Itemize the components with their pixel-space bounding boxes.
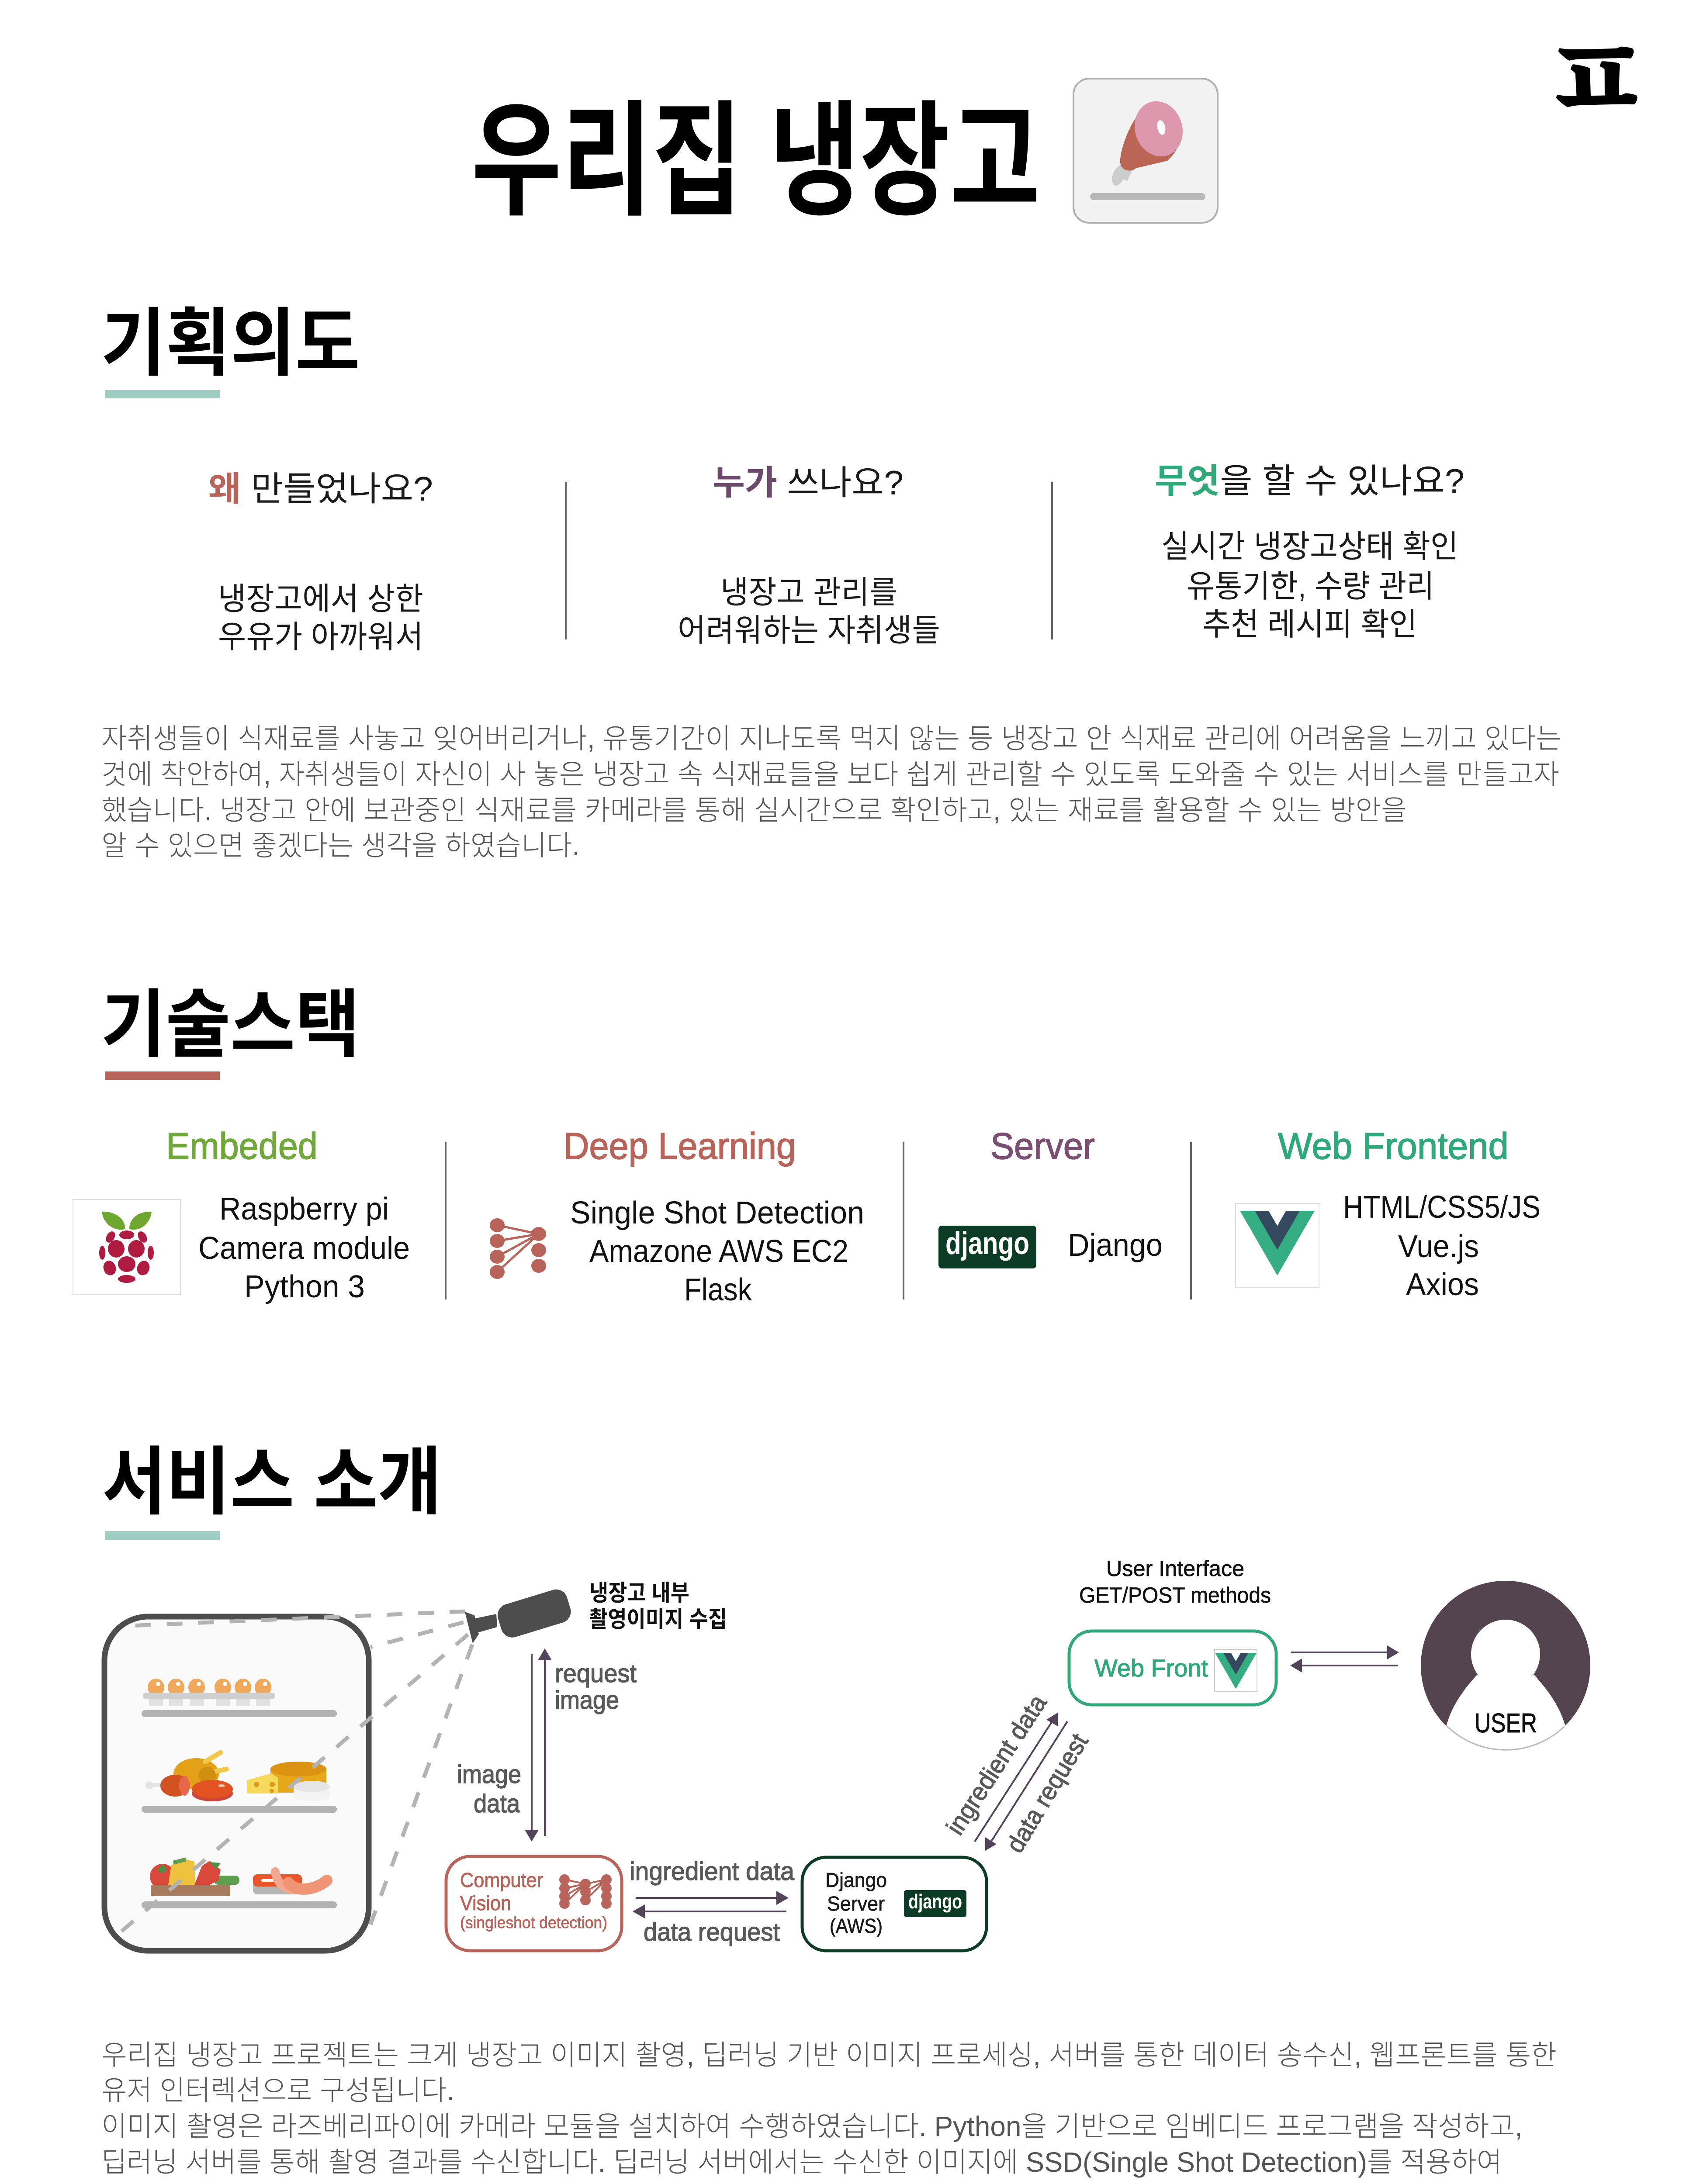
column heading: Deep Learning: [564, 1126, 796, 1167]
text block: service description: 이미지 촬영은 라즈베리파이에 카메라 모듈을 설치하여 수행하였습니다. Python을 기반으로 임베디드 프로그램을 작성하고,: [101, 2111, 1523, 2142]
label: request image: [555, 1659, 637, 1714]
label: user interface: GET/POST methods: [1079, 1583, 1271, 1607]
box: web front: [1069, 1631, 1276, 1705]
diagram: camera field of view: [117, 1611, 472, 1935]
arrow: ingredient data right: [636, 1891, 789, 1905]
box: computer vision: (singleshot detection): [460, 1914, 607, 1932]
food: vegetables: [150, 1857, 239, 1896]
heading: service introduction: 서비스 소개: [102, 1441, 442, 1524]
text block: service description: 유저 인터렉션으로 구성됩니다.: [101, 2075, 454, 2106]
label: user interface: User Interface: [1106, 1556, 1244, 1581]
label: camera: [589, 1581, 727, 1632]
label: data request diagonal: data request: [1001, 1729, 1094, 1858]
icon: raspberry pi: [73, 1199, 180, 1295]
icon: user: [1421, 1581, 1590, 1756]
panel: embedded: Python 3: [244, 1269, 365, 1304]
icon: django logo small: django: [908, 1890, 962, 1913]
box: django server: (AWS): [830, 1914, 883, 1937]
food: fish and shrimp: [253, 1872, 327, 1894]
tool name: Django: [1068, 1228, 1163, 1263]
tool list: HTML/CSS5/JS: [1343, 1190, 1541, 1225]
heading underline: [105, 1071, 220, 1080]
panel: web frontend: Vue.js: [1398, 1229, 1479, 1264]
icon: vue logo small: [1215, 1649, 1257, 1692]
heading: tech stack: 기술스택: [101, 984, 360, 1067]
label: ingredient data: ingredient data: [630, 1857, 795, 1886]
panel: why: [208, 470, 433, 655]
box: computer vision: [446, 1856, 622, 1951]
food: eggs: [143, 1679, 275, 1706]
diagram: fridge: [104, 1617, 369, 1951]
label: user interface: [1079, 1556, 1271, 1607]
question: 누가 쓰나요?: [713, 463, 904, 502]
column heading: Web Frontend: [1278, 1126, 1509, 1167]
label: request image: request: [555, 1659, 637, 1688]
label: ingredient data diagonal: ingredient data: [941, 1689, 1052, 1840]
box: computer vision: Vision: [460, 1892, 511, 1914]
panel: deep learning: [490, 1126, 864, 1307]
icon: neural network: [490, 1218, 546, 1279]
food: poultry and meat: [145, 1752, 233, 1801]
column heading: Server: [990, 1126, 1095, 1167]
box: web front: Web Front: [1094, 1654, 1208, 1682]
arrow: data request diagonal: [985, 1721, 1067, 1851]
label: request image: image: [555, 1686, 619, 1714]
text block: planning description: 것에 착안하여, 자취생들이 자신이 사 놓은 냉장고 속 식재료들을 보다 쉽게 관리할 수 있도록 도와줄 수 있는 서비스를 만들고자: [101, 759, 1559, 790]
label: image data: [457, 1760, 521, 1818]
arrow: from user: [1290, 1659, 1398, 1673]
panel: web frontend: [1236, 1126, 1541, 1302]
panel: deep learning: Flask: [684, 1272, 752, 1307]
panel: web frontend: Axios: [1406, 1267, 1479, 1302]
column heading: Embeded: [166, 1126, 318, 1167]
arrow: to user: [1291, 1645, 1399, 1659]
tool list: Single Shot Detection: [570, 1196, 864, 1230]
icon: neural network small: [560, 1875, 611, 1908]
icon: meat: [1073, 79, 1218, 223]
food: cheese: [247, 1762, 330, 1801]
text block: planning description: 했습니다. 냉장고 안에 보관중인 식재료를 카메라를 통해 실시간으로 확인하고, 있는 재료를 활용할 수 있는 방안을: [101, 795, 1407, 826]
icon: camera: [465, 1586, 574, 1643]
panel: deep learning: Amazone AWS EC2: [589, 1234, 848, 1269]
arrow: request image up: [538, 1648, 552, 1836]
label: image data: data: [474, 1790, 520, 1818]
tool list: Raspberry pi: [219, 1192, 389, 1227]
panel: what: 추천 레시피 확인: [1202, 607, 1417, 642]
panel: server: [938, 1126, 1163, 1268]
box: django server: Django: [825, 1869, 887, 1891]
box: django server: [802, 1857, 987, 1951]
title: 우리집 냉장고: [471, 92, 1040, 231]
box: computer vision: Computer: [460, 1869, 543, 1891]
text block: planning description: 알 수 있으면 좋겠다는 생각을 하였습니다.: [101, 830, 580, 861]
answer: 실시간 냉장고상태 확인: [1161, 529, 1458, 564]
answer: 냉장고 관리를: [720, 575, 897, 610]
heading underline: [105, 1531, 220, 1540]
box: django server: Server: [827, 1892, 885, 1915]
shelves: [142, 1710, 337, 1908]
icon: user: USER: [1475, 1708, 1537, 1738]
icon: vue logo: [1236, 1203, 1319, 1287]
label: camera: 촬영이미지 수집: [589, 1607, 727, 1632]
question: 왜 만들었나요?: [208, 470, 433, 508]
label: camera: 냉장고 내부: [589, 1581, 689, 1606]
text block: service description: [101, 2039, 1603, 2184]
icon: django logo: django: [945, 1226, 1029, 1261]
panel: embedded: Camera module: [198, 1231, 410, 1266]
panel: what: [1155, 462, 1464, 642]
answer: 냉장고에서 상한: [218, 582, 423, 617]
heading: planning intent: 기획의도: [101, 302, 360, 385]
panel: who: [678, 463, 940, 648]
panel: what: 유통기한, 수량 관리: [1187, 569, 1434, 604]
text block: service description: 딥러닝 서버를 통해 촬영 결과를 수신합니다. 딥러닝 서버에서는 수신한 이미지에 SSD(Single Shot Detection)를 적용하여: [101, 2146, 1502, 2178]
panel: who: 어려워하는 자취생들: [678, 613, 940, 648]
text block: planning description: 자취생들이 식재료를 사놓고 잊어버리거나, 유통기간이 지나도록 먹지 않는 등 냉장고 안 식재료 관리에 어려움을 느끼고 있다는: [101, 723, 1561, 754]
panel: embedded: [73, 1126, 410, 1304]
arrow: image data down: [525, 1654, 539, 1842]
question: 무엇을 할 수 있나요?: [1155, 462, 1464, 500]
panel: why: 우유가 아까워서: [218, 620, 423, 655]
icon: django logo: [938, 1226, 1036, 1268]
text block: service description: 우리집 냉장고 프로젝트는 크게 냉장고 이미지 촬영, 딥러닝 기반 이미지 프로세싱, 서버를 통한 데이터 송수신, 웹프론트를 통한: [101, 2039, 1557, 2071]
text block: planning description: [101, 723, 1561, 861]
label: image data: image: [457, 1760, 521, 1789]
heading underline: [105, 390, 220, 398]
arrow: ingredient data diagonal: [975, 1713, 1058, 1842]
arrow: data request left: [633, 1904, 786, 1918]
label: data request: data request: [644, 1918, 780, 1946]
